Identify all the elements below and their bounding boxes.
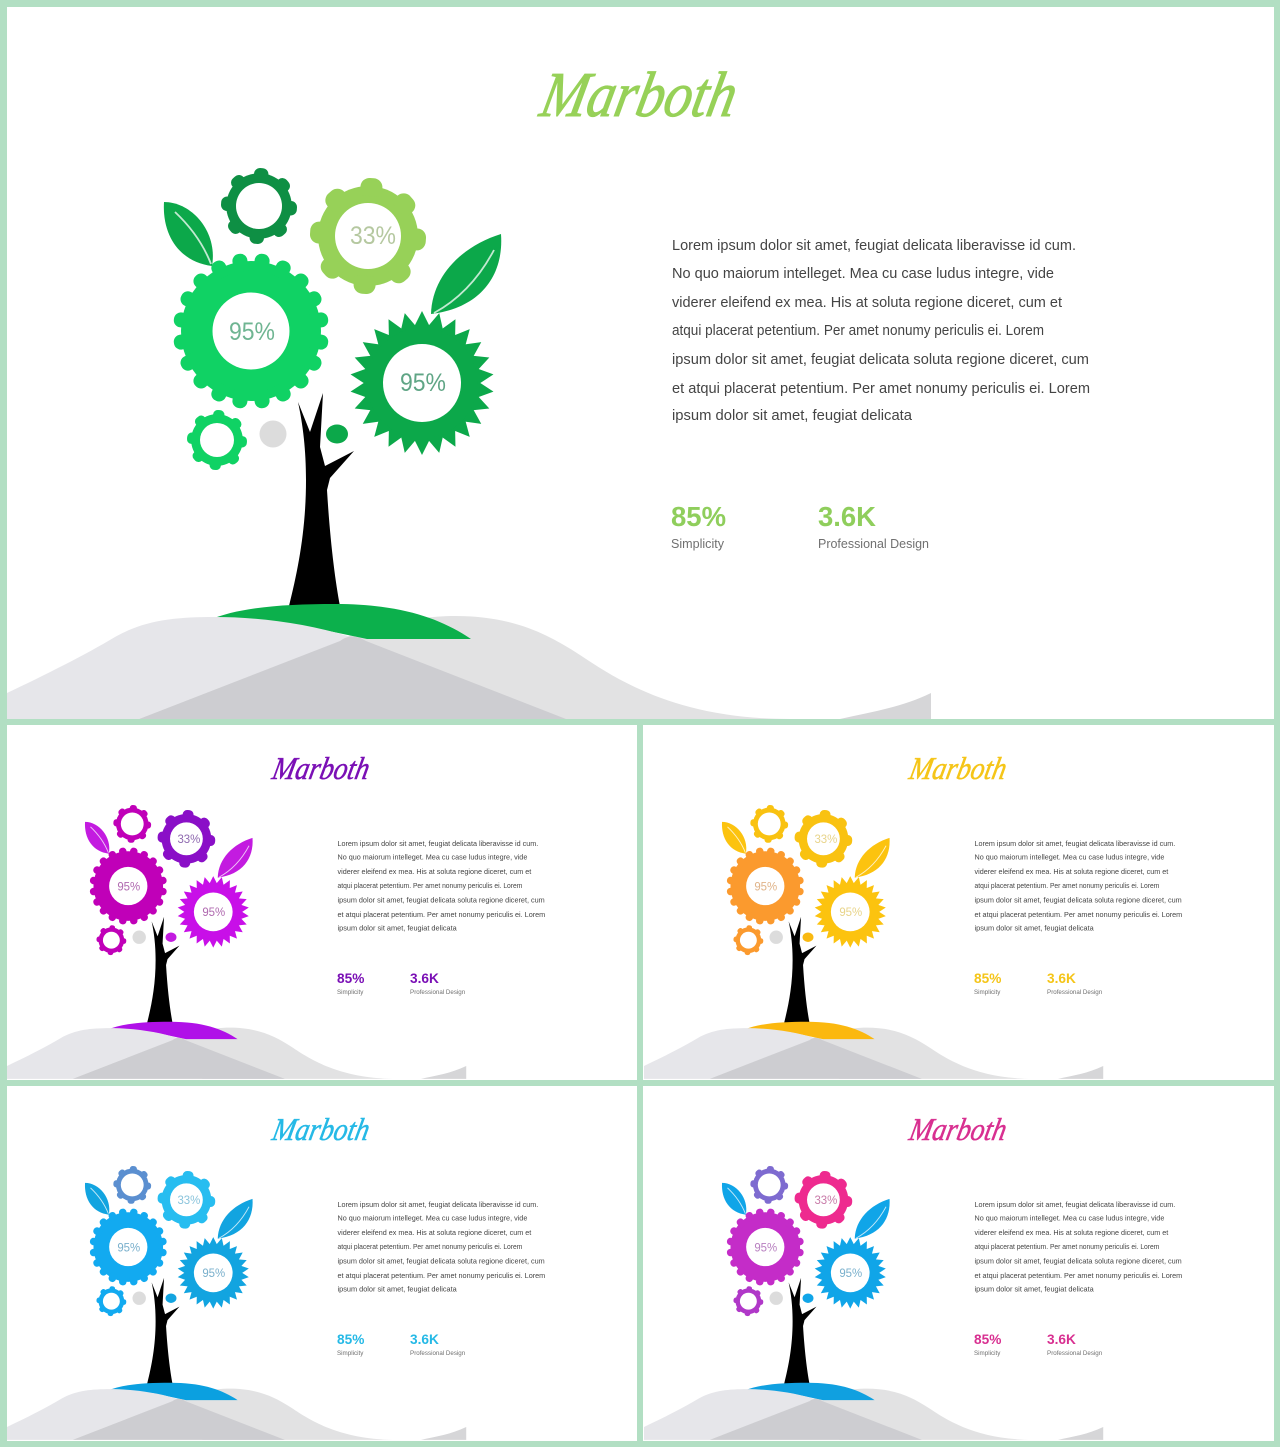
body text: viderer eleifend ex mea. His at soluta regione diceret, cum et xyxy=(975,1228,1168,1237)
grey dot xyxy=(132,931,146,944)
tree trunk xyxy=(289,393,354,606)
stat: 85%: 85% xyxy=(974,1331,1001,1347)
title: Marboth xyxy=(534,59,744,130)
ground mound xyxy=(744,1383,875,1400)
back hill xyxy=(172,1389,396,1440)
body text: ipsum dolor sit amet, feugiat delicata xyxy=(672,408,913,424)
stat: 3.6K: Professional Design xyxy=(1047,989,1103,996)
gear: small xyxy=(187,410,247,470)
stat: 85% xyxy=(337,970,364,996)
icon: right leaf xyxy=(431,234,501,314)
body text: Lorem ipsum dolor sit amet, feugiat delicata liberavisse id cum. xyxy=(338,1200,538,1209)
icon: right leaf xyxy=(218,838,253,878)
body text xyxy=(338,1200,545,1293)
stat: 85% xyxy=(671,501,726,551)
back hill xyxy=(810,1389,1033,1440)
stat: 3.6K: 3.6K xyxy=(1047,970,1076,986)
gear: top xyxy=(113,1166,151,1204)
icon: left leaf xyxy=(722,822,746,854)
stat: 85% xyxy=(974,970,1001,996)
gear: big 95%: 95% xyxy=(117,1241,140,1255)
stat: 3.6K xyxy=(410,1331,466,1357)
gear: big 95%: 95% xyxy=(229,318,275,346)
body text: No quo maiorum intelleget. Mea cu case ludus integre, vide xyxy=(975,1214,1164,1223)
gear: big 95%: 95% xyxy=(754,880,777,894)
body text xyxy=(975,1200,1182,1293)
gear: small xyxy=(96,1286,126,1316)
gear: spiked 95% xyxy=(177,1237,249,1309)
gear: big 95% xyxy=(726,847,804,925)
coloured dot xyxy=(326,424,348,444)
body text xyxy=(672,238,1090,424)
body text: et atqui placerat petentium. Per amet nonumy periculis ei. Lorem xyxy=(672,381,1090,397)
gear: big 95%: 95% xyxy=(117,880,140,894)
stat: 85%: Simplicity xyxy=(974,989,1001,996)
front hills xyxy=(644,1028,1103,1079)
gear: spiked 95% xyxy=(177,876,249,948)
body text: ipsum dolor sit amet, feugiat delicata soluta regione diceret, cum xyxy=(338,895,545,904)
tree trunk xyxy=(147,917,179,1023)
body text: viderer eleifend ex mea. His at soluta regione diceret, cum et xyxy=(338,1228,531,1237)
grey dot xyxy=(260,420,286,448)
ground mound xyxy=(744,1022,875,1039)
gear: top xyxy=(221,168,297,244)
stat: 85%: Simplicity xyxy=(671,536,724,551)
gear: spiked 95% xyxy=(814,1237,886,1309)
icon: right leaf xyxy=(855,1199,890,1239)
gear: 33%: 33% xyxy=(177,832,200,846)
body text: ipsum dolor sit amet, feugiat delicata soluta regione diceret, cum xyxy=(338,1256,545,1265)
panel: purple slide xyxy=(7,725,637,1080)
gear: 33%: 33% xyxy=(814,832,837,846)
body text: atqui placerat petentium. Per amet nonumy periculis ei. Lorem xyxy=(975,881,1159,890)
front hills xyxy=(644,1389,1103,1440)
stat: 3.6K xyxy=(1047,1331,1103,1357)
stat: 3.6K: Professional Design xyxy=(818,536,929,551)
body text: ipsum dolor sit amet, feugiat delicata xyxy=(975,1284,1094,1293)
icon: right leaf xyxy=(855,838,890,878)
stat: 85% xyxy=(974,1331,1001,1357)
body text xyxy=(338,839,545,932)
gear: small xyxy=(96,925,126,955)
body text: ipsum dolor sit amet, feugiat delicata soluta regione diceret, cum xyxy=(975,1256,1182,1265)
tree trunk xyxy=(147,1278,179,1384)
stat: 85%: 85% xyxy=(974,970,1001,986)
stat: 85% xyxy=(337,1331,364,1357)
front hills xyxy=(7,1028,466,1079)
tree trunk xyxy=(784,917,816,1023)
body text: viderer eleifend ex mea. His at soluta regione diceret, cum et xyxy=(338,867,531,876)
stat: 3.6K: 3.6K xyxy=(1047,1331,1076,1347)
panel: yellow slide xyxy=(643,725,1274,1080)
back hill xyxy=(340,616,790,719)
stat: 3.6K: 3.6K xyxy=(410,1331,439,1347)
body text: atqui placerat petentium. Per amet nonumy periculis ei. Lorem xyxy=(975,1242,1159,1251)
title: Marboth xyxy=(906,1111,1010,1147)
stat: 3.6K: 3.6K xyxy=(410,970,439,986)
body text: et atqui placerat petentium. Per amet nonumy periculis ei. Lorem xyxy=(975,1271,1182,1280)
stat: 3.6K xyxy=(818,501,929,551)
stat: 3.6K xyxy=(1047,970,1103,996)
ground mound xyxy=(209,604,471,639)
gear: top xyxy=(750,805,788,843)
gear: big 95%: 95% xyxy=(754,1241,777,1255)
ground mound xyxy=(107,1383,238,1400)
gear: top xyxy=(750,1166,788,1204)
gear: small xyxy=(733,925,763,955)
gear: top xyxy=(113,805,151,843)
body text: atqui placerat petentium. Per amet nonumy periculis ei. Lorem xyxy=(338,1242,522,1251)
title: Marboth xyxy=(269,750,373,786)
gear: 33%: 33% xyxy=(814,1193,837,1207)
coloured dot xyxy=(803,1293,813,1303)
front hills xyxy=(7,617,931,719)
coloured dot xyxy=(166,932,176,942)
back hill xyxy=(810,1028,1033,1079)
body text: ipsum dolor sit amet, feugiat delicata soluta regione diceret, cum xyxy=(975,895,1182,904)
body text: ipsum dolor sit amet, feugiat delicata xyxy=(975,923,1094,932)
icon: left leaf xyxy=(722,1183,746,1215)
coloured dot xyxy=(803,932,813,942)
gear: spiked 95%: 95% xyxy=(202,1266,225,1280)
body text: Lorem ipsum dolor sit amet, feugiat delicata liberavisse id cum. xyxy=(672,238,1076,254)
gear: 33%: 33% xyxy=(350,222,396,250)
grey dot xyxy=(769,1292,783,1305)
ground mound xyxy=(107,1022,238,1039)
gear: spiked 95%: 95% xyxy=(400,369,446,397)
panel: blue slide xyxy=(7,1086,637,1441)
gear: 33% xyxy=(157,1171,216,1229)
title: Marboth xyxy=(906,750,1010,786)
icon: left leaf xyxy=(85,1183,109,1215)
body text: No quo maiorum intelleget. Mea cu case ludus integre, vide xyxy=(338,853,527,862)
gear: 33%: 33% xyxy=(177,1193,200,1207)
body text: viderer eleifend ex mea. His at soluta regione diceret, cum et xyxy=(975,867,1168,876)
body text: Lorem ipsum dolor sit amet, feugiat delicata liberavisse id cum. xyxy=(338,839,538,848)
body text: ipsum dolor sit amet, feugiat delicata xyxy=(338,923,457,932)
gear: 33% xyxy=(794,1171,853,1229)
gear: big 95% xyxy=(89,847,167,925)
icon: left leaf xyxy=(85,822,109,854)
stat: 85%: 85% xyxy=(337,1331,364,1347)
body text: ipsum dolor sit amet, feugiat delicata xyxy=(338,1284,457,1293)
tree trunk xyxy=(784,1278,816,1384)
gear: big 95% xyxy=(726,1208,804,1286)
gear: small xyxy=(733,1286,763,1316)
body text: et atqui placerat petentium. Per amet nonumy periculis ei. Lorem xyxy=(338,910,545,919)
body text: viderer eleifend ex mea. His at soluta regione diceret, cum et xyxy=(672,295,1062,311)
stat: 3.6K: Professional Design xyxy=(410,989,466,996)
body text: Lorem ipsum dolor sit amet, feugiat delicata liberavisse id cum. xyxy=(975,839,1175,848)
gear: big 95% xyxy=(173,253,329,409)
body text: et atqui placerat petentium. Per amet nonumy periculis ei. Lorem xyxy=(975,910,1182,919)
gear: 33% xyxy=(794,810,853,868)
gear: spiked 95% xyxy=(814,876,886,948)
gear: spiked 95%: 95% xyxy=(202,905,225,919)
icon: left leaf xyxy=(164,202,213,266)
coloured dot xyxy=(166,1293,176,1303)
body text xyxy=(975,839,1182,932)
stat: 85%: Simplicity xyxy=(974,1350,1001,1357)
gear: spiked 95%: 95% xyxy=(839,905,862,919)
stat: 3.6K: Professional Design xyxy=(410,1350,466,1357)
stat: 3.6K: 3.6K xyxy=(818,501,876,532)
body text: atqui placerat petentium. Per amet nonumy periculis ei. Lorem xyxy=(672,323,1044,339)
icon: right leaf xyxy=(218,1199,253,1239)
grey dot xyxy=(769,931,783,944)
body text: No quo maiorum intelleget. Mea cu case ludus integre, vide xyxy=(338,1214,527,1223)
grey dot xyxy=(132,1292,146,1305)
body text: atqui placerat petentium. Per amet nonumy periculis ei. Lorem xyxy=(338,881,522,890)
gear: spiked 95% xyxy=(350,311,494,455)
stat: 85%: Simplicity xyxy=(337,989,364,996)
body text: Lorem ipsum dolor sit amet, feugiat delicata liberavisse id cum. xyxy=(975,1200,1175,1209)
body text: No quo maiorum intelleget. Mea cu case ludus integre, vide xyxy=(672,266,1054,282)
gear: big 95% xyxy=(89,1208,167,1286)
stat: 85%: 85% xyxy=(337,970,364,986)
body text: ipsum dolor sit amet, feugiat delicata soluta regione diceret, cum xyxy=(672,352,1089,368)
title: Marboth xyxy=(269,1111,373,1147)
body text: No quo maiorum intelleget. Mea cu case ludus integre, vide xyxy=(975,853,1164,862)
body text: et atqui placerat petentium. Per amet nonumy periculis ei. Lorem xyxy=(338,1271,545,1280)
stat: 85%: Simplicity xyxy=(337,1350,364,1357)
panel: green slide xyxy=(7,7,1274,719)
gear: 33% xyxy=(157,810,216,868)
stat: 85%: 85% xyxy=(671,501,726,532)
stat: 3.6K: Professional Design xyxy=(1047,1350,1103,1357)
stat: 3.6K xyxy=(410,970,466,996)
back hill xyxy=(172,1028,396,1079)
front hills xyxy=(7,1389,466,1440)
gear: spiked 95%: 95% xyxy=(839,1266,862,1280)
gear: 33% xyxy=(309,177,427,295)
panel: pink slide xyxy=(643,1086,1274,1441)
